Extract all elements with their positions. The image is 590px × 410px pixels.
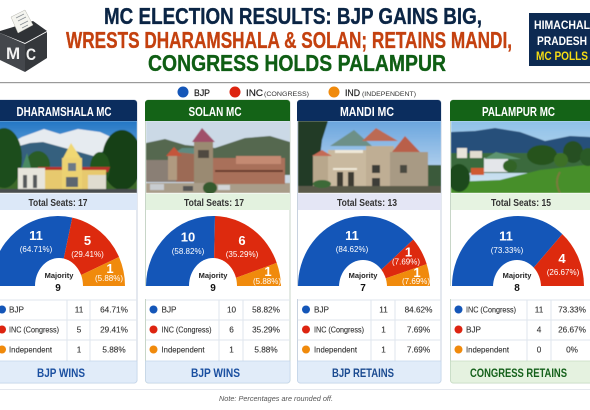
table: Solan: INC (Congress) (162, 326, 212, 334)
chart: Palampur gauge: (26.67%) (547, 268, 580, 277)
chart: Dharamshala gauge: 1 (106, 261, 114, 276)
table: Solan: Independent (162, 346, 205, 354)
footnote: Note: Percentages are rounded off. (219, 394, 333, 403)
chart: Palampur gauge: 8 (514, 283, 520, 294)
table: Mandi: 84.62% (405, 306, 432, 314)
table: Solan: 1 (229, 346, 234, 354)
table: Palampur: 11 (535, 306, 544, 314)
icon: ballot box: M (6, 44, 20, 63)
table: Solan: 58.82% (252, 306, 280, 314)
table: Dharamshala: 29.41% (100, 326, 128, 334)
chart: Mandi gauge: 11 (345, 228, 359, 243)
table: Solan: 10 (227, 306, 236, 314)
table: Palampur: 0 (537, 346, 542, 354)
legend: (INDEPENDENT) (362, 91, 416, 98)
panel: Dharamshala MC: BJP WINS (37, 366, 85, 380)
table: Mandi: 7.69% (407, 346, 430, 354)
table: Dharamshala: INC (Congress) (9, 326, 59, 334)
table: Dharamshala: 11 (75, 306, 84, 314)
table: Palampur: 73.33% (558, 306, 586, 314)
panel: Palampur MC (448, 100, 590, 383)
legend: (CONGRESS) (264, 91, 309, 98)
table: Solan: 5.88% (254, 346, 278, 354)
chart: Mandi gauge: 1 (405, 244, 412, 260)
chart: Mandi gauge: 1 (413, 265, 421, 280)
table: Mandi: 7.69% (407, 326, 430, 334)
chart: Dharamshala gauge: (64.71%) (20, 245, 53, 254)
table: Mandi: BJP (314, 306, 330, 314)
result: Congress retains (450, 361, 590, 383)
title (66, 3, 512, 76)
title: CONGRESS HOLDS PALAMPUR (148, 50, 446, 76)
table: Palampur: BJP (466, 326, 482, 334)
table: Palampur: 4 (537, 326, 542, 334)
chart: Mandi gauge: (84.62%) (336, 245, 369, 254)
panel: Palampur MC: PALAMPUR MC (482, 105, 555, 119)
table: Solan: 6 (229, 326, 234, 334)
photo: Palampur tea gardens (448, 121, 590, 193)
panel: Dharamshala MC (0, 100, 142, 383)
panel: Dharamshala MC: Total Seats: 17 (28, 198, 88, 209)
chart: Dharamshala gauge: 9 (55, 283, 61, 294)
panel: Dharamshala MC: DHARAMSHALA MC (16, 105, 112, 119)
result: BJP wins (146, 361, 290, 383)
panel header: Dharamshala (0, 100, 137, 121)
badge: Himachal Pradesh MC polls (529, 13, 590, 66)
panel: Mandi MC: Total Seats: 13 (337, 198, 397, 209)
chart: Mandi gauge: 7 (360, 283, 366, 294)
table: Mandi: Independent (314, 346, 358, 354)
table: Dharamshala: 64.71% (100, 306, 128, 314)
table: Mandi: 1 (381, 346, 386, 354)
chart: Palampur gauge: Majority (503, 271, 532, 280)
panel header: Palampur (450, 100, 590, 121)
table: Dharamshala: 5 (77, 326, 82, 334)
table: Palampur: 0% (566, 346, 578, 354)
legend (178, 86, 416, 99)
chart: Palampur gauge: 11 (499, 228, 513, 244)
chart: Solan gauge: 10 (181, 230, 195, 244)
photo: Solan heritage building (146, 121, 290, 194)
chart: Dharamshala gauge: (29.41%) (71, 250, 104, 259)
table: Palampur (451, 300, 590, 361)
icon: ballot box: C (26, 45, 36, 64)
photo: Dharamshala hall and mountains (0, 121, 142, 193)
table: Palampur: 26.67% (558, 326, 586, 334)
table: Mandi: 11 (379, 306, 388, 314)
table: Palampur: Independent (466, 346, 510, 354)
table: Dharamshala: BJP (9, 306, 25, 314)
table: Palampur: INC (Congress) (466, 306, 516, 314)
panel: Solan MC: Total Seats: 17 (184, 198, 244, 209)
chart: Solan gauge: 1 (264, 264, 272, 279)
table: Dharamshala: 1 (77, 346, 82, 354)
panel header: Mandi (297, 100, 441, 121)
chart: Palampur gauge (450, 216, 590, 314)
chart: Mandi gauge: (7.69%) (392, 258, 420, 266)
total seats: Palampur (451, 194, 590, 210)
chart: Mandi gauge (296, 216, 436, 314)
table: Solan: BJP (162, 306, 177, 314)
table: Dharamshala: 5.88% (102, 346, 126, 354)
chart: Dharamshala gauge (0, 216, 130, 314)
chart: Dharamshala gauge: 11 (29, 228, 43, 243)
panel: Solan MC: SOLAN MC (188, 105, 242, 119)
panel: Solan MC (144, 100, 290, 383)
table: Solan: 35.29% (252, 326, 280, 334)
chart: Solan gauge: Majority (199, 271, 228, 280)
photo: Mandi palace (298, 121, 441, 193)
panel: Solan MC: BJP WINS (191, 366, 240, 380)
table: Mandi: 1 (381, 326, 386, 334)
chart: Solan gauge (144, 216, 284, 314)
chart: Solan gauge: (5.88%) (253, 277, 281, 286)
chart: Palampur gauge: (73.33%) (491, 246, 524, 255)
panel header: Solan (145, 100, 290, 121)
title: MC ELECTION RESULTS: BJP GAINS BIG, (104, 3, 482, 29)
legend: BJP (194, 88, 210, 99)
total seats: Dharamshala (0, 194, 137, 210)
chart: Mandi gauge: Majority (349, 271, 378, 280)
chart: Solan gauge: (35.29%) (226, 250, 259, 259)
table: Mandi: INC (Congress) (314, 326, 364, 334)
icon: ballot box (0, 10, 47, 72)
table: Mandi (298, 300, 441, 361)
chart: Mandi gauge: (7.69%) (402, 277, 430, 286)
chart: Palampur gauge: 4 (558, 251, 566, 266)
result: BJP retains (298, 361, 441, 383)
table: Dharamshala: Independent (9, 346, 53, 354)
panel: Mandi MC (296, 100, 441, 383)
total seats: Mandi (298, 194, 441, 210)
chart: Solan gauge: 6 (238, 233, 246, 248)
panel: Palampur MC: Total Seats: 15 (491, 198, 551, 209)
legend: IND (345, 88, 360, 99)
chart: Dharamshala gauge: 5 (84, 233, 91, 248)
table: Dharamshala (0, 300, 137, 361)
total seats: Solan (146, 194, 290, 210)
legend: INC (246, 88, 263, 99)
chart: Solan gauge: (58.82%) (172, 247, 205, 256)
panel: Mandi MC: MANDI MC (340, 105, 394, 119)
result: BJP wins (0, 361, 137, 383)
table: Solan (146, 300, 290, 361)
chart: Dharamshala gauge: (5.88%) (95, 274, 123, 283)
chart: Dharamshala gauge: Majority (45, 271, 74, 280)
panel: Mandi MC: BJP RETAINS (332, 366, 394, 380)
chart: Solan gauge: 9 (210, 283, 216, 294)
